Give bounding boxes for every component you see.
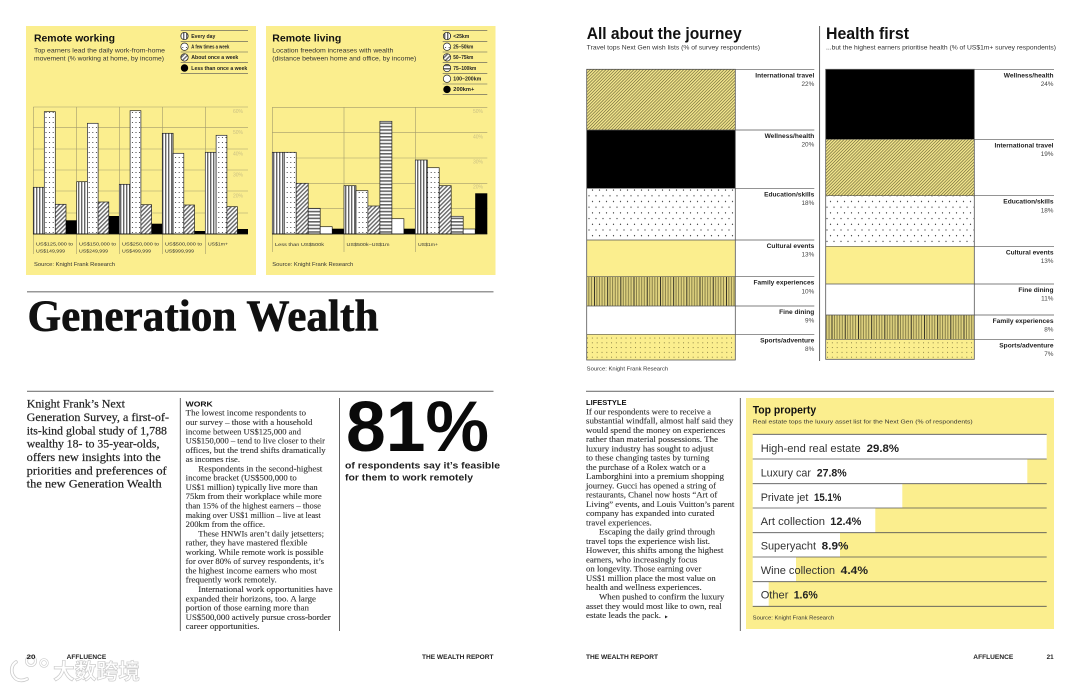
text column: lifestyle: Escaping the daily grind through: [599, 528, 716, 537]
chart: high earners stacked bar: International travel: [994, 142, 1054, 149]
chart: travel wish list stacked bar: International travel: [755, 72, 814, 79]
footer: right page: [586, 655, 1054, 661]
bar chart: remote living: Less than US$500k: [275, 242, 325, 248]
footer: left page: AFFLUENCE: [67, 655, 106, 661]
text column: lifestyle: asset they would most like to own, real: [586, 602, 722, 611]
bar chart: luxury assets: 29.8%: [867, 443, 899, 455]
bar chart: remote working: US$499,999: [122, 249, 151, 255]
text column: work: US$500,000 actively pursue cross-border: [186, 613, 331, 622]
bar chart: luxury assets: Other: [761, 589, 789, 601]
legend: work frequency: Less than once a week: [191, 66, 248, 72]
text column: lifestyle: travel tops the experience wish list.: [586, 537, 710, 546]
footer: left page: THE WEALTH REPORT: [422, 655, 494, 661]
chart: high earners stacked bar: 8%: [1044, 327, 1054, 334]
text column: lifestyle: earners, who increasingly focus: [586, 556, 697, 564]
heading: all about the journey: All about the journey: [587, 25, 742, 43]
text column: work: 200km from the office.: [186, 520, 265, 529]
bar chart: remote working: US$125,000 to: [36, 242, 73, 248]
text column: lifestyle: on longevity. Those earning over: [586, 565, 702, 574]
chart: travel wish list stacked bar: 8%: [805, 346, 815, 353]
bar chart: luxury assets: 12.4%: [830, 516, 861, 528]
heading: remote working: Remote working: [34, 32, 115, 44]
chart: travel wish list stacked bar: [587, 69, 815, 360]
text column: work: offices, but the trend shifts dramatically: [186, 446, 327, 455]
text: journey subtitle: Travel tops Next Gen wish lists (% of survey respondents): [587, 45, 760, 51]
chart: high earners stacked bar: 11%: [1041, 296, 1054, 303]
legend: work frequency: A few times a week: [191, 44, 229, 50]
bar chart: luxury assets: Luxury car: [761, 467, 811, 479]
bar chart: luxury assets: 15.1%: [814, 492, 841, 504]
bar chart: remote working: 30%: [233, 172, 244, 178]
source note: Source: Knight Frank Research: [272, 262, 353, 268]
legend: work frequency: [181, 31, 248, 73]
text column: lifestyle: health and wellness experiences.: [586, 583, 702, 592]
bar chart: remote living: [272, 107, 487, 252]
callout: 81%: [345, 388, 500, 483]
text column: work: These HNWIs aren’t daily jetsetters;: [198, 529, 324, 538]
text column: work: income between US$125,000 and: [186, 427, 302, 436]
chart: high earners stacked bar: [826, 69, 1054, 359]
text: remote living subtitle: (distance between home and office, by income): [272, 56, 416, 63]
icon: end mark: [665, 615, 668, 618]
text column: work: expanded their horizons, too. A large: [186, 594, 316, 603]
bar chart: remote working: US$150,000 to: [79, 242, 116, 248]
bar chart: remote living: US$1m+: [418, 242, 438, 248]
text column: lifestyle: estate leads the pack.: [586, 611, 661, 620]
chart: high earners stacked bar: 13%: [1041, 258, 1054, 265]
chart: high earners stacked bar: 18%: [1041, 207, 1054, 214]
chart: travel wish list stacked bar: Sports/adventure: [760, 337, 815, 344]
intro text block: offers new insights into the: [27, 450, 161, 464]
bar chart: luxury assets: 4.4%: [841, 565, 868, 577]
source note: Source: Knight Frank Research: [34, 262, 115, 268]
bar chart: remote working: US$1m+: [208, 242, 228, 248]
text column: work: [186, 399, 333, 631]
text column: lifestyle: rather than material possessions. The: [586, 435, 718, 444]
intro text block: the new Generation Wealth: [27, 477, 162, 491]
bar chart: remote working: US$149,999: [36, 249, 65, 255]
bar chart: remote working: US$250,000 to: [122, 242, 159, 248]
text column: work: The lowest income respondents to: [186, 409, 306, 418]
footer: left page: [26, 655, 494, 661]
callout caption: for them to work remotely: [345, 472, 474, 483]
footer: right page: AFFLUENCE: [973, 655, 1013, 661]
bar chart: luxury assets: Private jet: [761, 492, 809, 504]
text: top property subtitle: Real estate tops the luxury asset list for the Next Gen (% of respondents): [753, 420, 973, 426]
bar chart: luxury assets: High-end real estate: [761, 443, 861, 455]
bar chart: luxury assets: 1.6%: [794, 589, 818, 601]
text: remote working subtitle: movement (% working at home, by income): [34, 56, 164, 63]
legend: distance bands: 25–50km: [453, 44, 474, 50]
chart: high earners stacked bar: Sports/adventure: [999, 342, 1054, 349]
text column: work: working. While remote work is possible: [186, 548, 324, 557]
text column: work: as incomes rise.: [186, 455, 240, 464]
chart: high earners stacked bar: Fine dining: [1018, 287, 1054, 294]
chart: high earners stacked bar: 24%: [1041, 81, 1054, 88]
chart: high earners stacked bar: Education/skills: [1003, 199, 1054, 206]
footer: right page: THE WEALTH REPORT: [586, 655, 658, 661]
text column: work: making over US$1 million – live at least: [186, 511, 321, 520]
icon: watermark logo: [12, 656, 47, 680]
text column: work: our survey – those with a household: [186, 418, 313, 427]
text column: lifestyle: Lamborghini into a premium shopping: [586, 472, 725, 481]
chart: travel wish list stacked bar: 13%: [802, 252, 815, 259]
chart: travel wish list stacked bar: Education/skills: [764, 191, 815, 198]
bar chart: remote working: 20%: [233, 194, 244, 200]
legend: distance bands: 100–200km: [453, 76, 482, 82]
legend: work frequency: About once a week: [191, 55, 239, 61]
text column: lifestyle: company has expanded into curated: [586, 509, 715, 518]
bar chart: remote living: US$500k–US$1m: [346, 242, 390, 248]
panel: top property: [746, 398, 1054, 629]
intro text block: Knight Frank’s Next: [27, 397, 126, 411]
text column: lifestyle: When pushed to confirm the luxury: [599, 592, 725, 602]
panel: remote working: [26, 26, 256, 275]
heading: remote living: Remote living: [272, 32, 341, 44]
text column: work: for over 80% of survey respondents, it’s: [186, 557, 324, 566]
text column: work: rather, they have mastered flexible: [186, 539, 308, 548]
text column: work: the highest income earners who most: [186, 566, 317, 576]
watermark text: 大数跨境: [53, 660, 140, 684]
intro text block: [27, 397, 169, 491]
text column: lifestyle: US$1 million place the most value on: [586, 574, 717, 583]
text column: lifestyle: substantial windfall, almost half said they: [586, 417, 734, 426]
text column: lifestyle: the purchase of a Rolex watch or a: [586, 463, 706, 472]
chart: travel wish list stacked bar: 9%: [805, 318, 815, 325]
intro text block: wealthy 18- to 35-year-olds,: [27, 437, 159, 451]
bar chart: remote living: 50%: [473, 109, 484, 115]
chart: high earners stacked bar: 7%: [1044, 351, 1054, 358]
chart: high earners stacked bar: 19%: [1041, 151, 1054, 158]
heading: work: WORK: [186, 399, 213, 408]
watermark: [12, 656, 140, 684]
bar chart: remote working: US$249,999: [79, 249, 108, 255]
text: remote working subtitle: Top earners lead the daily work-from-home: [34, 48, 165, 55]
text column: work: US$1 million) typically live more than: [186, 483, 319, 492]
chart: high earners stacked bar: Family experiences: [993, 318, 1054, 325]
bar chart: remote working: 60%: [233, 109, 244, 115]
text column: work: Respondents in the second-highest: [198, 464, 323, 473]
source note: Source: Knight Frank Research: [587, 367, 668, 373]
chart: high earners stacked bar: Wellness/health: [1004, 72, 1054, 79]
text column: lifestyle: restaurants, Chanel now hosts “Art of: [586, 491, 718, 500]
legend: distance bands: 75–100km: [453, 66, 477, 72]
legend: distance bands: [443, 31, 487, 95]
intro text block: Generation Survey, a first-of-: [27, 410, 169, 424]
text column: lifestyle: If our respondents were to receive a: [586, 407, 711, 416]
bar chart: luxury assets: Art collection: [761, 516, 825, 528]
text column: work: US$150,000 – tend to live closer to their: [186, 436, 325, 446]
text: health subtitle: ...but the highest earners prioritise health (% of US$1m+ survey respondents): [826, 45, 1056, 51]
bar chart: remote living: 20%: [473, 184, 484, 190]
callout caption: of respondents say it’s feasible: [345, 460, 500, 471]
chart: travel wish list stacked bar: Family experiences: [753, 280, 815, 287]
bar chart: remote working: [33, 107, 248, 255]
bar chart: luxury assets: 27.8%: [817, 467, 847, 479]
chart: travel wish list stacked bar: Fine dining: [779, 309, 814, 316]
chart: travel wish list stacked bar: 22%: [802, 81, 815, 88]
text column: lifestyle: travel experiences.: [586, 518, 652, 527]
callout caption: [345, 460, 500, 483]
heading: top property: Top property: [753, 404, 817, 416]
text column: work: 75km from their workplace while more: [186, 492, 322, 501]
headline: Generation Wealth: [28, 290, 379, 340]
chart: travel wish list stacked bar: Cultural events: [767, 243, 815, 250]
bar chart: remote working: 40%: [233, 152, 244, 158]
legend: work frequency: Every day: [191, 34, 216, 40]
text: remote living subtitle: Location freedom increases with wealth: [272, 48, 394, 55]
heading: health first: Health first: [826, 25, 909, 43]
bar chart: luxury assets: [753, 434, 1047, 606]
footer: left page: 20: [26, 655, 36, 661]
bar chart: luxury assets: Superyacht: [761, 541, 817, 553]
chart: travel wish list stacked bar: 18%: [802, 200, 815, 207]
chart: travel wish list stacked bar: 20%: [802, 142, 815, 149]
text column: work: International work opportunities have: [198, 585, 333, 594]
bar chart: remote working: US$999,999: [165, 249, 194, 255]
text column: work: career opportunities.: [186, 622, 259, 631]
text column: work: portion of those earning more than: [186, 604, 310, 613]
text column: lifestyle: luxury industry has sought to adjust: [586, 444, 714, 453]
text column: lifestyle: journey. Gucci has opened a string of: [585, 481, 716, 490]
bar chart: luxury assets: 8.9%: [822, 541, 848, 553]
legend: distance bands: 50–75km: [453, 55, 474, 61]
big number: 81%: [346, 388, 489, 467]
text column: lifestyle: However, this shifts among the highest: [586, 546, 724, 555]
bar chart: remote living: 40%: [473, 134, 484, 140]
heading: lifestyle: LIFESTYLE: [586, 398, 627, 407]
intro text block: priorities and preferences of: [27, 463, 167, 477]
text: remote living subtitle: [272, 48, 416, 63]
legend: distance bands: 200km+: [453, 87, 474, 93]
text column: work: than 15% of the highest earners – those: [186, 502, 321, 510]
text column: lifestyle: to these changing tastes by turning: [586, 454, 710, 463]
panel: remote living: [266, 26, 496, 275]
footer: right page: 21: [1047, 655, 1054, 661]
legend: distance bands: <25km: [453, 34, 470, 40]
chart: high earners stacked bar: Cultural events: [1006, 249, 1054, 256]
source note: Source: Knight Frank Research: [753, 616, 834, 622]
bar chart: remote working: 50%: [233, 130, 244, 136]
chart: travel wish list stacked bar: Wellness/health: [765, 133, 814, 140]
text column: lifestyle: would spend the money on experiences: [586, 426, 725, 435]
text: remote working subtitle: [34, 48, 165, 63]
bar chart: luxury assets: Wine collection: [761, 565, 835, 577]
text column: work: frequently work remotely.: [186, 576, 277, 585]
intro text block: its-kind global study of 1,788: [27, 423, 167, 437]
text column: lifestyle: Living” events, and Louis Vuitton’s parent: [586, 500, 735, 509]
text column: work: income bracket (US$500,000 to: [186, 474, 297, 483]
text column: lifestyle: [585, 398, 735, 620]
bar chart: remote living: 30%: [473, 160, 484, 166]
bar chart: remote working: US$500,000 to: [165, 242, 202, 248]
chart: travel wish list stacked bar: 10%: [802, 288, 815, 295]
